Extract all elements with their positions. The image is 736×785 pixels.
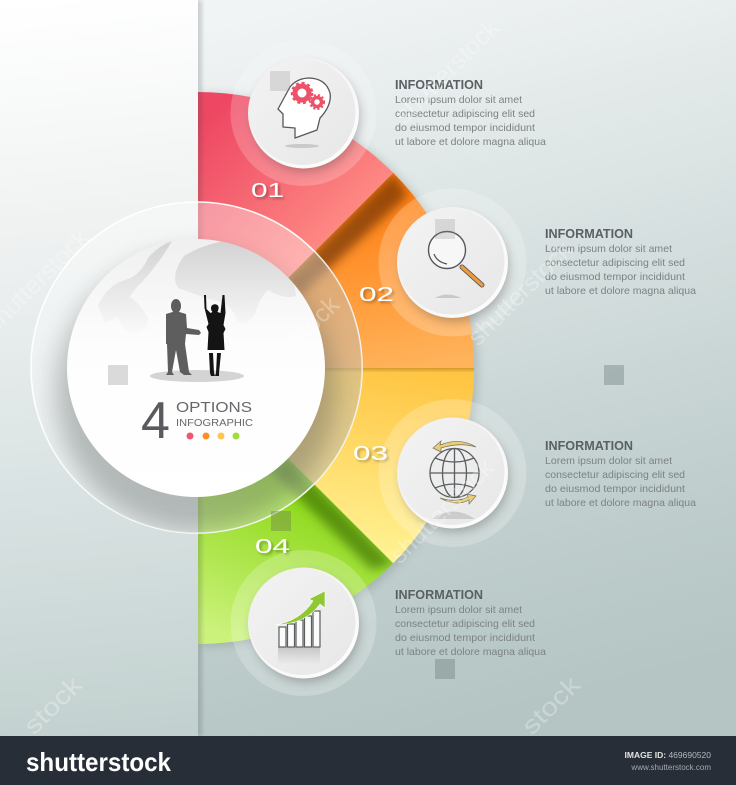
- central white circle: [67, 239, 325, 497]
- disc: [398, 208, 504, 314]
- watermarks: [0, 14, 586, 740]
- text block 1: [395, 78, 546, 148]
- segment 01 red: [198, 92, 393, 368]
- icon: two business people: [150, 295, 244, 382]
- text block 2: ut labore et dolore magna aliqua: [545, 285, 696, 297]
- text block 4: do eiusmod tempor incididunt: [395, 632, 535, 644]
- disc shadow: [401, 424, 509, 532]
- numeral 4: 4: [141, 392, 170, 450]
- left paper panel: [0, 0, 198, 736]
- glass disc: [31, 202, 362, 533]
- watermarks: stock: [18, 671, 88, 740]
- text block 1: consectetur adipiscing elit sed: [395, 108, 535, 120]
- label 04: 04: [255, 536, 290, 558]
- text block 4: ut labore et dolore magna aliqua: [395, 646, 546, 658]
- text block 3: [545, 439, 696, 509]
- white circle shadow: [56, 252, 336, 532]
- text block 2: Lorem ipsum dolor sit amet: [545, 243, 672, 255]
- halo: [378, 399, 526, 547]
- disc: [398, 419, 504, 525]
- disc shadow: [252, 64, 360, 172]
- woman silhouette: [204, 295, 226, 376]
- site url: www.shutterstock.com: [630, 763, 711, 772]
- watermarks: shutterstock: [462, 236, 578, 351]
- option 1 circle: [230, 64, 367, 186]
- text block 2: consectetur adipiscing elit sed: [545, 257, 685, 269]
- segment 03 yellow: [198, 368, 474, 563]
- infographic: INFOGRAPHIC: [176, 417, 253, 429]
- text block 3: ut labore et dolore magna aliqua: [545, 497, 696, 509]
- central glass ring: [30, 201, 363, 534]
- world map: [98, 242, 296, 311]
- label 02: 02: [359, 284, 394, 306]
- text block 3: do eiusmod tempor incididunt: [545, 483, 685, 495]
- color dots: [186, 432, 240, 440]
- disc: [250, 59, 356, 165]
- option 2 circle: [378, 188, 526, 336]
- text block 3: consectetur adipiscing elit sed: [545, 469, 685, 481]
- disc rim: [248, 568, 359, 678]
- left panel shadow on right panel: [193, 0, 202, 736]
- shadow of segment 01 on segment 02: [285, 173, 408, 296]
- fan outer shadow: [201, 94, 477, 646]
- number labels: [251, 180, 394, 558]
- text block 1: ut labore et dolore magna aliqua: [395, 136, 546, 148]
- text block 2: [545, 227, 696, 297]
- text block 4: [395, 588, 546, 658]
- footer bar: [0, 736, 736, 785]
- shadow of segment 03 on segment 04: [270, 455, 393, 570]
- option 4 circle: [230, 550, 376, 696]
- text block 1: INFORMATION: [395, 78, 483, 92]
- icon: growth chart: [275, 591, 325, 664]
- shadow of segment 02 on segment 03: [325, 368, 474, 372]
- text block 3: Lorem ipsum dolor sit amet: [545, 455, 672, 467]
- watermarks: shutterstock: [384, 454, 500, 569]
- icon: globe with arrows: [430, 441, 479, 519]
- watermarks: stock: [516, 671, 586, 740]
- ground shadow: [150, 370, 244, 382]
- icon: magnifier: [428, 232, 482, 298]
- disc: [250, 569, 356, 675]
- text block 2: do eiusmod tempor incididunt: [545, 271, 685, 283]
- disc shadow: [252, 574, 360, 682]
- glass tint over orange and yellow: [288, 252, 362, 484]
- halo: [230, 550, 376, 696]
- segment 02 orange: [198, 173, 474, 368]
- text block 3: INFORMATION: [545, 439, 633, 453]
- label 03: 03: [353, 443, 388, 465]
- text block 4: INFORMATION: [395, 588, 483, 602]
- footer logo: shutterstock: [26, 747, 171, 777]
- watermark square stamps: [108, 71, 624, 679]
- option 3 circle: [378, 399, 526, 547]
- text block 4: consectetur adipiscing elit sed: [395, 618, 535, 630]
- text block 1: Lorem ipsum dolor sit amet: [395, 94, 522, 106]
- halo: [378, 188, 526, 336]
- label 01: 01: [251, 180, 284, 202]
- watermarks: shutterstock: [389, 14, 505, 129]
- halo: [230, 94, 367, 186]
- man silhouette: [166, 299, 201, 375]
- disc rim: [397, 418, 508, 528]
- disc rim: [248, 58, 359, 168]
- segment 04 green: [198, 368, 393, 644]
- options: OPTIONS: [176, 399, 252, 416]
- logo text: 4 options infographic: [141, 392, 253, 450]
- text block 2: INFORMATION: [545, 227, 633, 241]
- disc rim: [397, 207, 508, 318]
- icon: head with gears: [278, 78, 330, 148]
- fan of four segments: [198, 92, 488, 646]
- disc shadow: [401, 214, 509, 322]
- image id: IMAGE ID: 469690520: [625, 750, 711, 760]
- text block 1: do eiusmod tempor incididunt: [395, 122, 535, 134]
- watermarks: shutterstock: [229, 291, 345, 406]
- text block 4: Lorem ipsum dolor sit amet: [395, 604, 522, 616]
